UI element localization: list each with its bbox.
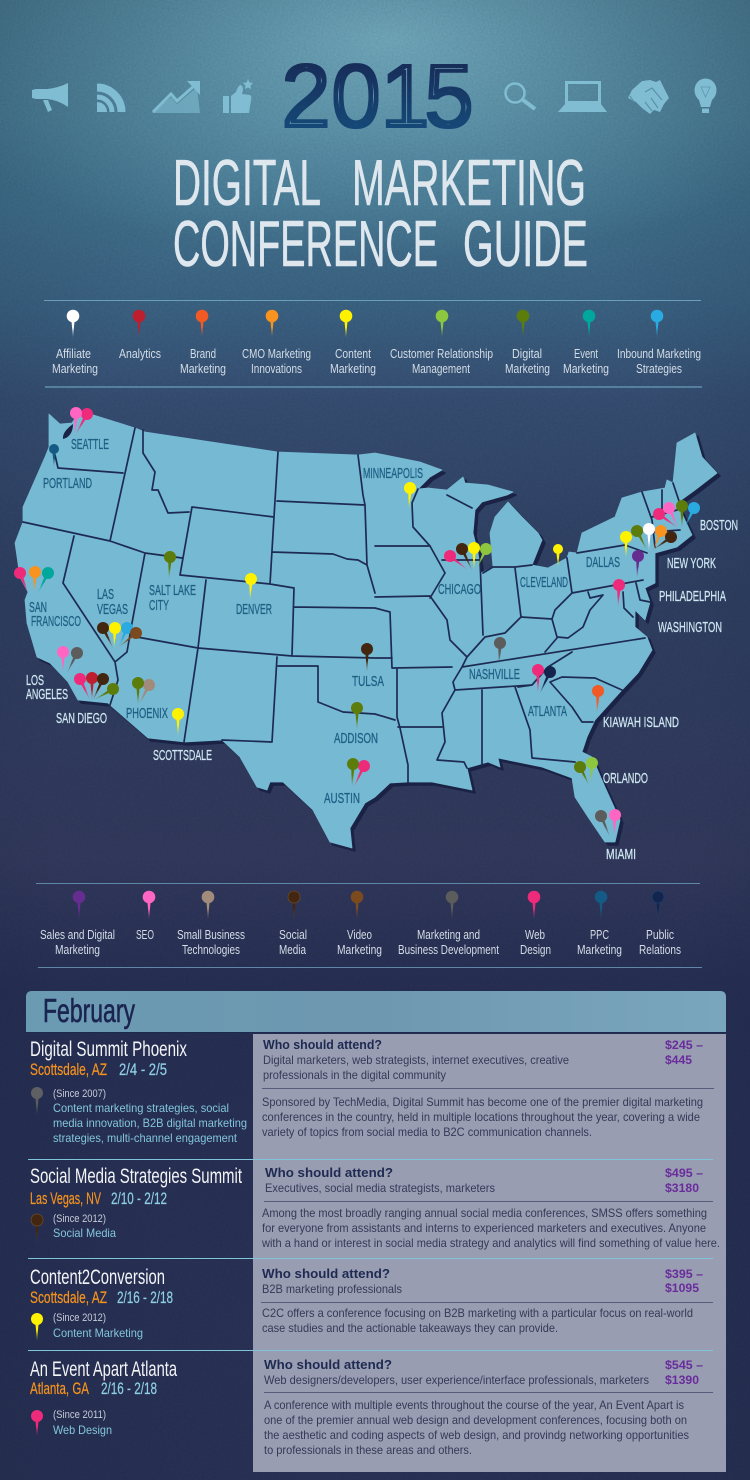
topics: (Since 2012) xyxy=(53,1312,106,1324)
state borders xyxy=(23,428,682,782)
pin: Minneapolis xyxy=(404,482,416,509)
legend: Brand Marketing xyxy=(180,310,226,376)
pin: Denver xyxy=(245,573,257,600)
attendee details: $395 – xyxy=(665,1267,703,1281)
pins: Atlanta xyxy=(532,664,556,693)
month band: February: February xyxy=(43,992,135,1029)
legend: Small Business Technologies: Technologies xyxy=(182,943,240,957)
legend: Web Design xyxy=(520,891,551,957)
icon: laptop xyxy=(558,82,607,112)
row separators xyxy=(28,1160,713,1350)
legend: PPC Marketing: Marketing xyxy=(577,943,622,957)
topics: Web Design xyxy=(53,1423,112,1437)
year heading 2015: 2015 xyxy=(281,47,474,147)
conference info xyxy=(30,1358,177,1398)
pins: Las Vegas xyxy=(97,622,142,648)
legend: Sales and Digital Marketing: Sales and Digital xyxy=(40,928,115,942)
legend: Customer Relationship Management xyxy=(390,310,493,376)
conference info: 2/16 - 2/18 xyxy=(117,1289,173,1307)
attendee details: $545 – xyxy=(665,1358,703,1372)
conference info: 2/10 - 2/12 xyxy=(111,1190,167,1208)
legend: Web Design: Design xyxy=(520,943,551,957)
pin: Addison xyxy=(351,702,363,730)
pin: Scottsdale xyxy=(172,708,184,736)
label: Cleveland: CLEVELAND xyxy=(520,575,568,591)
attendee details: $495 – xyxy=(665,1166,703,1180)
attendee details: conferences in the country, held in multiple locations throughout the year, covering a wide xyxy=(262,1110,700,1124)
pin: Tulsa xyxy=(361,643,373,672)
pin: Social Media xyxy=(31,1214,43,1243)
pin: Kiawah Island xyxy=(592,685,604,713)
attendee details: B2B marketing professionals xyxy=(262,1282,402,1296)
pin: Web Design xyxy=(31,1410,43,1437)
topics: Content Marketing xyxy=(53,1326,143,1340)
legend: Sales and Digital Marketing xyxy=(40,891,115,957)
conference info: Social Media Strategies Summit xyxy=(30,1165,242,1188)
topics xyxy=(53,1312,143,1340)
conference info: An Event Apart Atlanta xyxy=(30,1358,177,1381)
topics: (Since 2011) xyxy=(53,1409,106,1421)
pin: Content Marketing xyxy=(31,1313,43,1341)
icon: rss feed xyxy=(97,88,122,112)
legend: Event Marketing: Marketing xyxy=(563,362,609,376)
legend: Video Marketing: Marketing xyxy=(337,943,382,957)
label: Scottsdale: SCOTTSDALE xyxy=(153,748,212,764)
legend: Content Marketing: Marketing xyxy=(330,362,376,376)
legend: SEO: SEO xyxy=(136,928,154,942)
legend: Web Design: Web xyxy=(525,928,545,942)
topics: Social Media xyxy=(53,1226,116,1240)
label: Austin: AUSTIN xyxy=(324,791,360,807)
conference info: Scottsdale, AZ xyxy=(30,1289,107,1307)
legend: Marketing and Business Development: Marketing and xyxy=(417,928,480,942)
legend: Social Media xyxy=(279,891,307,957)
attendee details: Who should attend? xyxy=(264,1357,392,1372)
icon: growth chart xyxy=(152,81,200,113)
main title xyxy=(173,146,588,280)
legend: Public Relations xyxy=(639,891,681,957)
legend: Analytics xyxy=(119,310,161,361)
bottom legend xyxy=(40,891,681,957)
pin: Marketing and Business Development xyxy=(31,1087,43,1116)
label: Salt Lake City: SALT LAKE xyxy=(149,583,196,599)
attendee details: $3180 xyxy=(665,1181,699,1195)
legend: Small Business Technologies: Small Business xyxy=(177,928,245,942)
attendee details: C2C offers a conference focusing on B2B marketing with a particular focus on real-world xyxy=(262,1306,693,1320)
label: Phoenix: PHOENIX xyxy=(126,706,168,722)
legend: Inbound Marketing Strategies xyxy=(617,310,701,376)
label: New York: NEW YORK xyxy=(667,556,716,572)
pins: Los Angeles xyxy=(57,646,83,673)
pins: Seattle xyxy=(70,407,93,435)
attendee details: Who should attend? xyxy=(263,1037,382,1052)
legend: Inbound Marketing Strategies: Inbound Marketing xyxy=(617,347,701,361)
conference info: Atlanta, GA xyxy=(30,1380,89,1398)
legend: CMO Marketing Innovations: CMO Marketing xyxy=(242,347,311,361)
label: Portland: PORTLAND xyxy=(43,476,92,492)
legend: Content Marketing xyxy=(330,310,376,376)
label: Las Vegas xyxy=(97,587,128,618)
label: San Diego: SAN DIEGO xyxy=(56,711,107,727)
attendee details xyxy=(262,1037,714,1139)
legend: CMO Marketing Innovations: Innovations xyxy=(251,362,302,376)
map city labels xyxy=(26,437,738,863)
pins: Boston xyxy=(653,500,700,528)
legend: SEO xyxy=(136,891,155,942)
legend: PPC Marketing xyxy=(577,891,622,957)
attendee details: $1095 xyxy=(665,1281,699,1295)
main title: GUIDE xyxy=(463,207,588,280)
label: Seattle: SEATTLE xyxy=(71,437,109,453)
icon: light bulb xyxy=(694,78,716,113)
pins: Austin xyxy=(347,758,370,787)
main title: MARKETING xyxy=(352,146,586,219)
label: Chicago: CHICAGO xyxy=(438,582,481,598)
label: San Francisco: SAN xyxy=(29,600,47,616)
conference info xyxy=(30,1038,187,1079)
topics: Content marketing strategies, social xyxy=(53,1101,229,1115)
attendee details xyxy=(261,1165,720,1250)
label: Los Angeles xyxy=(26,673,68,703)
legend: Inbound Marketing Strategies: Strategies xyxy=(636,362,682,376)
label: Addison: ADDISON xyxy=(334,731,378,747)
legend: Video Marketing xyxy=(337,891,382,957)
attendee details: to professionals in these areas and others. xyxy=(264,1443,472,1457)
label: Las Vegas: VEGAS xyxy=(97,602,128,618)
attendee details: $445 xyxy=(665,1053,692,1067)
map of United States xyxy=(14,407,738,863)
label: Minneapolis: MINNEAPOLIS xyxy=(363,466,423,482)
icon: magnifying glass xyxy=(506,84,535,109)
label: Los Angeles: ANGELES xyxy=(26,687,68,703)
conference: Digital Summit Phoenix xyxy=(30,1037,714,1145)
legend: Event Marketing xyxy=(563,310,609,376)
attendee details: variety of topics from social media to B2C communication channels. xyxy=(262,1125,592,1139)
legend: Content Marketing: Content xyxy=(335,347,371,361)
label: San Francisco xyxy=(29,600,81,630)
label: Las Vegas: LAS xyxy=(97,587,114,603)
pins: New York xyxy=(620,523,677,558)
topics xyxy=(53,1409,112,1437)
legend: Event Marketing: Event xyxy=(574,347,598,361)
label: Tulsa: TULSA xyxy=(352,674,384,690)
month band: February xyxy=(26,991,726,1032)
main title: CONFERENCE xyxy=(173,207,438,280)
legend: Marketing and Business Development: Business Development xyxy=(398,943,499,957)
conference info xyxy=(30,1266,173,1307)
attendee details: the aesthetic and coding aspects of web design, and provindg networking opportunities xyxy=(264,1428,689,1442)
attendee details: Who should attend? xyxy=(265,1165,393,1180)
topics: (Since 2007) xyxy=(53,1088,106,1100)
attendee details: for everyone from assistants and interns to experienced marketers and executives. Anyone xyxy=(262,1221,706,1235)
main title: DIGITAL xyxy=(173,146,321,219)
legend: Public Relations: Relations xyxy=(639,943,681,957)
pin: Philadelphia xyxy=(632,550,644,578)
pin: Nashville xyxy=(494,637,506,665)
topics xyxy=(53,1088,247,1145)
legend: Brand Marketing: Marketing xyxy=(180,362,226,376)
pin: Washington xyxy=(613,579,625,607)
label: Miami: MIAMI xyxy=(606,847,636,863)
topics xyxy=(53,1213,116,1240)
topics: strategies, multi-channel engagement xyxy=(53,1131,238,1145)
conference: An Event Apart Atlanta xyxy=(30,1357,713,1457)
legend: Marketing and Business Development xyxy=(398,891,499,957)
label: Salt Lake City: CITY xyxy=(149,598,169,614)
legend: CMO Marketing Innovations xyxy=(242,310,311,376)
legend: Affiliate Marketing: Marketing xyxy=(52,362,98,376)
attendee details: case studies and the actionable takeaways they can provide. xyxy=(262,1321,558,1335)
icon: megaphone xyxy=(32,83,68,112)
icon: thumbs up with star xyxy=(223,79,253,113)
conference info: Content2Conversion xyxy=(30,1266,165,1289)
legend: Affiliate Marketing xyxy=(52,310,98,376)
conference info: 2/16 - 2/18 xyxy=(101,1380,157,1398)
legend: Analytics: Analytics xyxy=(119,347,161,361)
attendee details xyxy=(264,1357,713,1457)
label: Kiawah Island: KIAWAH ISLAND xyxy=(603,715,679,731)
legend: Brand Marketing: Brand xyxy=(190,347,216,361)
label: San Francisco: FRANCISCO xyxy=(31,614,81,630)
legend: Social Media: Media xyxy=(279,943,306,957)
label: Denver: DENVER xyxy=(236,602,272,618)
legend: Public Relations: Public xyxy=(646,928,674,942)
attendee details: Sponsored by TechMedia, Digital Summit has become one of the premier digital marketing xyxy=(262,1095,703,1109)
legend: Customer Relationship Management: Management xyxy=(412,362,470,376)
legend: Digital Marketing: Marketing xyxy=(505,362,550,376)
attendee details: Web designers/developers, user experience/interface professionals, marketers xyxy=(264,1373,649,1387)
label: Dallas: DALLAS xyxy=(586,555,620,571)
conference info: Las Vegas, NV xyxy=(30,1190,101,1208)
attendee details: one of the premier annual web design and development conferences, focusing both on xyxy=(264,1413,687,1427)
pins: Portland xyxy=(49,444,59,467)
legend: Sales and Digital Marketing: Marketing xyxy=(55,943,100,957)
icon: handshake xyxy=(628,80,669,114)
attendee details xyxy=(261,1266,713,1335)
topics: (Since 2012) xyxy=(53,1213,106,1225)
pins: San Francisco xyxy=(14,566,54,593)
legend: PPC Marketing: PPC xyxy=(590,928,609,942)
attendee details: with a hand or interest in social media strategy and analytics will find something of value here. xyxy=(261,1236,720,1250)
attendee details: $245 – xyxy=(665,1038,703,1052)
conference info: Scottsdale, AZ xyxy=(30,1061,107,1079)
pins: Chicago xyxy=(444,542,492,570)
land mass xyxy=(15,413,720,851)
conference info: 2/4 - 2/5 xyxy=(119,1061,167,1079)
attendee details: Among the most broadly ranging annual social media conferences, SMSS offers something xyxy=(262,1206,707,1220)
attendee details: Who should attend? xyxy=(262,1266,390,1281)
legend: Video Marketing: Video xyxy=(347,928,372,942)
conference: Content2Conversion xyxy=(30,1266,713,1341)
pins: Orlando xyxy=(574,757,598,785)
pins: Miami xyxy=(595,809,621,837)
pin: Salt Lake City xyxy=(164,551,176,579)
legend: Small Business Technologies xyxy=(177,891,245,957)
attendee details: Executives, social media strategists, marketers xyxy=(265,1181,495,1195)
conference info xyxy=(30,1165,242,1208)
top legend xyxy=(52,310,701,376)
label: Los Angeles: LOS xyxy=(26,673,44,689)
label: Atlanta: ATLANTA xyxy=(528,704,567,720)
attendee details: A conference with multiple events throughout the course of the year, An Event Apart is xyxy=(264,1398,684,1412)
details panel backdrop xyxy=(253,1034,726,1472)
legend: Affiliate Marketing: Affiliate xyxy=(56,347,91,361)
label: Salt Lake City xyxy=(149,583,196,614)
pins: Phoenix xyxy=(132,677,155,705)
legend: Digital Marketing: Digital xyxy=(512,347,542,361)
topics: media innovation, B2B digital marketing xyxy=(53,1116,247,1130)
pin: Cleveland xyxy=(553,544,563,567)
label: Nashville: NASHVILLE xyxy=(469,667,520,683)
attendee details: Digital marketers, web strategists, internet executives, creative xyxy=(263,1053,569,1067)
attendee details: professionals in the digital community xyxy=(263,1068,446,1082)
conference info: Digital Summit Phoenix xyxy=(30,1038,187,1061)
conference: Social Media Strategies Summit xyxy=(30,1165,720,1250)
header icons xyxy=(32,78,716,114)
legend: Customer Relationship Management: Customer Relationship xyxy=(390,347,493,361)
legend: Social Media: Social xyxy=(279,928,307,942)
legend: Digital Marketing xyxy=(505,310,550,376)
label: Orlando: ORLANDO xyxy=(603,771,648,787)
map pins xyxy=(14,407,700,837)
attendee details: $1390 xyxy=(665,1373,699,1387)
pins: San Diego xyxy=(74,672,119,700)
